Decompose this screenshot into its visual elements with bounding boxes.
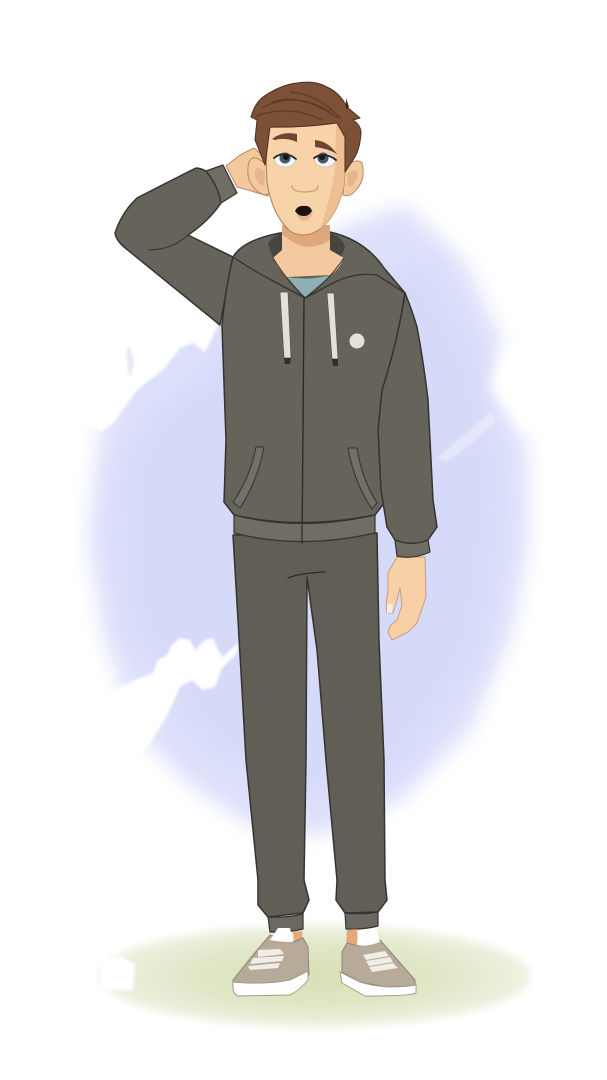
background: lavender watercolor blob	[50, 205, 560, 835]
ears	[248, 158, 269, 195]
ground: green watercolor patch	[99, 925, 531, 1027]
pant cuffs	[268, 912, 378, 932]
white brush edges and streaks	[50, 280, 560, 760]
pants	[233, 533, 387, 917]
t-shirt	[287, 275, 331, 297]
pockets	[233, 447, 264, 508]
face	[266, 120, 345, 235]
zipper	[302, 297, 304, 543]
raised sleeve	[115, 165, 237, 325]
hood seam	[233, 257, 405, 298]
drawstrings	[280, 292, 291, 358]
hair	[251, 82, 361, 172]
hoodie hem	[234, 515, 375, 543]
right sleeve	[378, 293, 437, 557]
hood inner	[268, 233, 345, 258]
hand: lower right	[386, 557, 426, 640]
mouth	[296, 211, 313, 221]
left shoe	[233, 928, 309, 996]
nose	[292, 186, 318, 192]
eyebrows	[272, 133, 297, 142]
badge	[350, 334, 364, 348]
head	[248, 82, 363, 235]
right shoe	[340, 928, 416, 996]
raised hand behind head	[226, 148, 268, 196]
eyes	[274, 153, 296, 167]
character: man in dark tracksuit	[115, 82, 437, 996]
hoodie body	[222, 225, 405, 543]
neck	[273, 225, 344, 277]
